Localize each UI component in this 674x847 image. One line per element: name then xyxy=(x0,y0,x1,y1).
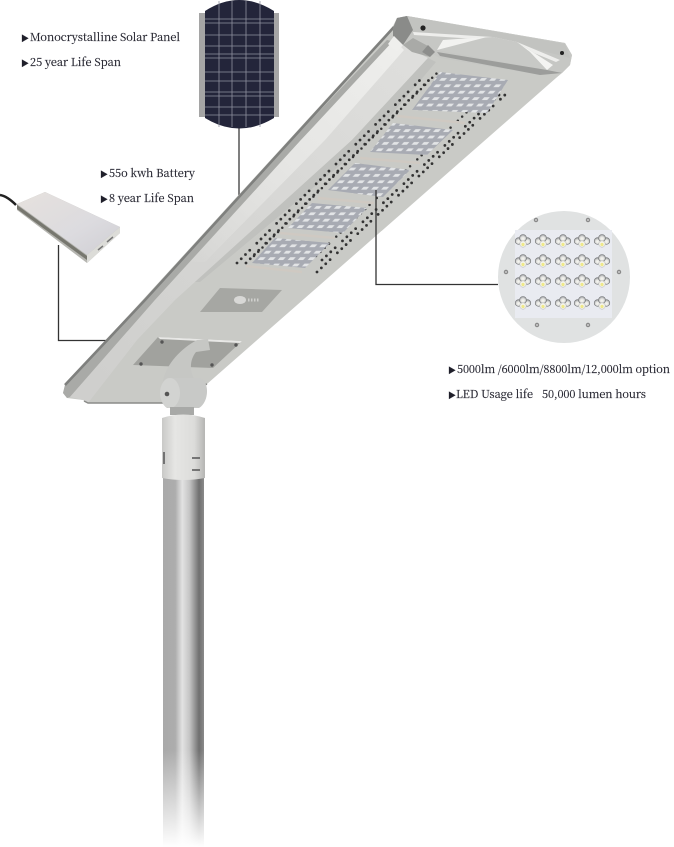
sensor plate xyxy=(200,288,282,312)
text: battery specs: ▶ xyxy=(100,194,108,205)
bracket arm xyxy=(162,339,210,396)
text: LED specs: 50,000 lumen hours xyxy=(542,386,646,402)
text: battery specs: ▶ xyxy=(100,169,108,180)
text: battery specs: 55o kwh Battery xyxy=(109,165,196,181)
lamp end cap xyxy=(388,16,572,75)
lamp outer shell xyxy=(63,16,572,403)
text: solar panel specs: ▶ xyxy=(21,58,29,69)
text: solar panel specs: 25 year Life Span xyxy=(30,54,121,70)
connector line: LED module xyxy=(376,190,498,284)
text: LED specs: LED Usage life xyxy=(456,386,533,402)
street light pole xyxy=(160,470,207,847)
solar panel cells xyxy=(205,0,274,128)
connector line: battery xyxy=(58,245,108,340)
text: battery specs xyxy=(100,165,196,206)
lamp grey groove band xyxy=(63,40,395,398)
text: battery specs: 8 year Life Span xyxy=(109,190,194,206)
text: LED specs: ▶ xyxy=(448,365,456,376)
lamp light rail xyxy=(70,42,428,403)
lamp dark edge xyxy=(65,27,394,385)
battery body xyxy=(17,192,120,263)
text: solar panel specs: Monocrystalline Solar Panel xyxy=(30,29,180,45)
battery illustration xyxy=(0,192,120,263)
lamp bottom edge xyxy=(84,384,207,403)
battery cable xyxy=(0,195,16,205)
lamp inner shadow band xyxy=(195,58,436,282)
ventilation holes xyxy=(237,72,507,272)
LED modules xyxy=(246,72,508,272)
LED close-up xyxy=(498,211,630,343)
connector line: solar panel xyxy=(238,126,240,196)
pivot joint xyxy=(160,378,207,408)
solar panel illustration xyxy=(199,0,279,128)
text: solar panel specs: ▶ xyxy=(21,33,29,44)
lamp head xyxy=(63,16,572,403)
solar panel grid xyxy=(205,1,274,127)
pole collar xyxy=(162,414,205,480)
mounting bracket xyxy=(133,337,242,480)
text: LED specs xyxy=(448,361,670,402)
text: LED specs: 5000lm /6000lm/8800lm/12,000lm option xyxy=(457,361,670,377)
lamp bright rail facet xyxy=(190,40,404,262)
text: LED specs: ▶ xyxy=(448,390,456,401)
text: solar panel specs xyxy=(21,29,180,70)
solar panel frame xyxy=(199,13,279,117)
mounting plate xyxy=(133,337,242,368)
